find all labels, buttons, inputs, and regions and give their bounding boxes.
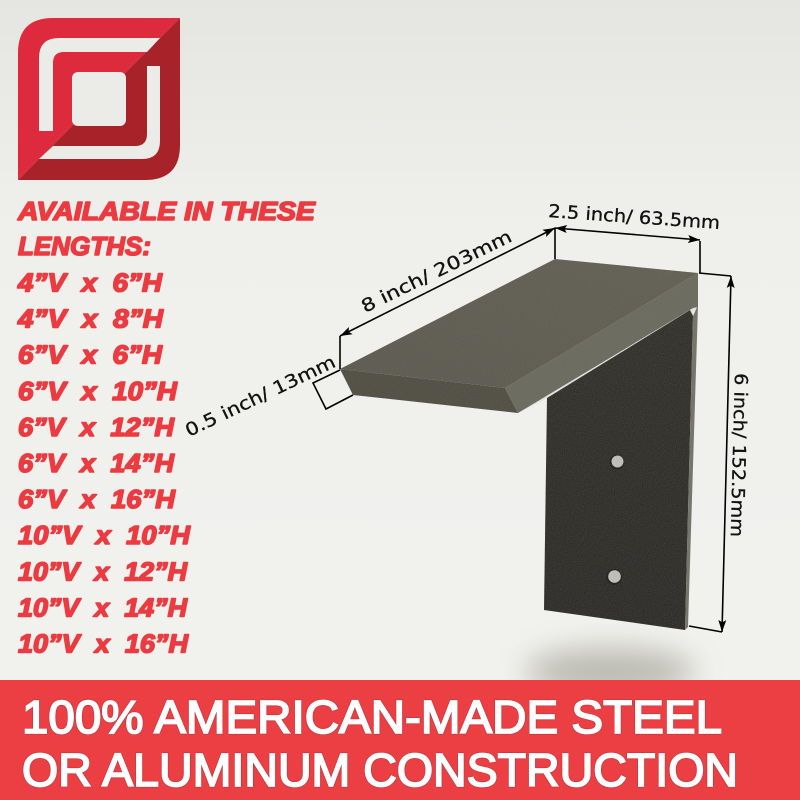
logo [18,18,180,180]
list of lengths: 10”V x 10”H [18,520,191,550]
list of lengths: 4”V x 8”H [17,304,164,334]
shelf top face [340,259,698,388]
list of lengths: 6”V x 12”H [18,412,175,442]
banner headline [22,691,738,796]
heading: available lengths: LENGTHS: [18,231,151,261]
bracket shadow [525,648,695,696]
list of lengths: 6”V x 10”H [18,376,178,406]
banner headline: OR ALUMINUM CONSTRUCTION [22,744,738,796]
dimension: 2.5 inch: 2.5 inch/ 63.5mm [548,201,721,234]
list of lengths: 10”V x 16”H [18,628,189,658]
dimension: 0.5 inch: 0.5 inch/ 13mm [182,352,339,442]
upper hole [610,454,624,470]
lower hole [606,569,622,585]
dimension: 2.5 inch [548,201,721,273]
banner headline: 100% AMERICAN-MADE STEEL [22,691,722,743]
list of lengths: 10”V x 12”H [18,556,188,586]
list of lengths: 6”V x 16”H [18,484,176,514]
banner [0,680,800,800]
list of lengths: 6”V x 6”H [18,340,163,370]
plate side edge [685,305,698,630]
metal texture [340,259,698,630]
dimension: 6 inch [689,273,751,632]
list of lengths: 10”V x 14”H [18,592,188,622]
dimension: 8 inch [340,226,555,369]
heading: available lengths: AVAILABLE IN THESE [17,196,316,226]
heading: available lengths [17,196,316,261]
bracket photo [340,259,698,630]
list of lengths [17,268,191,658]
vertical plate [544,310,693,630]
shelf front bevel [340,369,518,413]
dimension: 8 inch: 8 inch/ 203mm [358,226,515,317]
dimension: 6 inch: 6 inch/ 152.5mm [726,373,751,537]
list of lengths: 4”V x 6”H [17,268,163,298]
shelf right edge [505,273,698,413]
list of lengths: 6”V x 14”H [18,448,175,478]
